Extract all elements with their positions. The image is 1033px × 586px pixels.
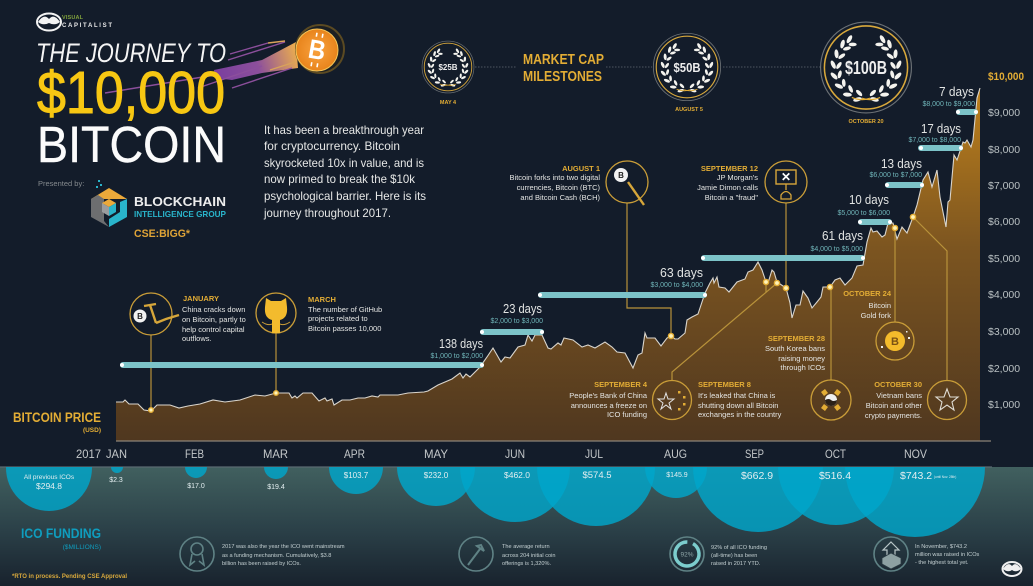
milestone: $100B <box>821 22 911 125</box>
callout: September 12: SEPTEMBER 12 <box>701 164 758 173</box>
duration: 7 days: $8,000 to $9,000 <box>922 101 975 108</box>
callout: August 1: and Bitcoin Cash (BCH) <box>520 193 600 202</box>
intro text: It has been a breakthrough year <box>264 123 424 137</box>
callout: October 24: B <box>891 336 899 348</box>
y axis labels: $4,000 <box>988 289 1020 301</box>
y axis labels: $5,000 <box>988 253 1020 265</box>
month axis: MAR <box>263 449 288 461</box>
callout: August 1: B <box>618 171 624 180</box>
icon: bitcoin coin <box>296 25 344 73</box>
callout: October 24: OCTOBER 24 <box>843 289 892 298</box>
ICO funding values: $2.3 <box>109 477 123 484</box>
stat: ICO mainstream: billion has been raised by ICOs. <box>222 561 301 567</box>
y axis labels: $7,000 <box>988 180 1020 192</box>
milestone: $50B: $50B <box>674 60 700 75</box>
bitcoin price label: BITCOIN PRICE <box>13 410 101 425</box>
duration: 13 days <box>869 156 924 188</box>
stat: 92 percent ring: 92% <box>680 552 694 558</box>
stat: ICO mainstream <box>180 537 345 571</box>
duration: 23 days: $2,000 to $3,000 <box>490 318 543 325</box>
duration: 61 days <box>701 228 865 261</box>
logo: Blockchain Intelligence Group: CSE:BIGG* <box>134 228 191 240</box>
month axis: 2017 <box>76 449 101 461</box>
callout: January: B <box>137 312 143 321</box>
logo: Visual Capitalist <box>37 14 112 30</box>
logo: Visual Capitalist: VISUAL <box>62 15 84 21</box>
duration: 138 days <box>120 336 484 368</box>
ICO funding values: $17.0 <box>187 483 205 490</box>
callout: September 4: ICO funding <box>607 410 647 419</box>
chart: bitcoin price area <box>116 88 991 441</box>
callout: September 8: SEPTEMBER 8 <box>698 380 751 389</box>
ICO funding values: All previous ICOs <box>24 474 75 481</box>
bitcoin price label: (USD) <box>83 427 101 434</box>
callout: September 4: SEPTEMBER 4 <box>594 380 648 389</box>
stat: 92 percent ring: 92% of all ICO funding <box>711 545 767 551</box>
callout: September 28: through ICOs <box>780 363 825 372</box>
callout: August 1: AUGUST 1 <box>562 164 600 173</box>
y axis labels: $9,000 <box>988 107 1020 119</box>
callout: January: JANUARY <box>183 294 219 303</box>
ICO funding label: ICO FUNDING <box>21 525 101 541</box>
intro text <box>263 123 426 220</box>
duration: 13 days: $6,000 to $7,000 <box>869 172 922 179</box>
callout: October 30: OCTOBER 30 <box>874 380 922 389</box>
stat: November record: - the highest total yet. <box>915 560 969 566</box>
callout: September 4: announces a freeze on <box>571 401 647 410</box>
duration: 63 days: $3,000 to $4,000 <box>650 282 703 289</box>
axis band divider <box>0 466 992 468</box>
callout: September 8: shutting down all Bitcoin <box>698 401 778 410</box>
month axis: OCT <box>825 449 846 461</box>
ICO funding values: $103.7 <box>344 471 369 480</box>
ICO funding values: (until Nov. 28th) <box>934 475 956 479</box>
callout: March: projects related to <box>308 314 368 323</box>
month axis <box>76 449 927 461</box>
duration: 10 days: 10 days <box>849 192 889 207</box>
ICO funding values: $662.9 <box>741 470 773 482</box>
callout: March: Bitcoin passes 10,000 <box>308 324 381 333</box>
stat: average return: The average return <box>502 544 550 550</box>
callout: September 8: exchanges in the country <box>698 410 782 419</box>
milestones heading <box>523 52 604 85</box>
ICO funding values: $462.0 <box>504 470 530 480</box>
duration: 7 days <box>922 84 978 115</box>
logo: footer mark <box>1002 562 1022 576</box>
stat: ICO mainstream: 2017 was also the year the ICO went mainstream <box>222 544 345 550</box>
callout: October 24: Gold fork <box>861 311 891 320</box>
y axis labels: $3,000 <box>988 326 1020 338</box>
callout: September 4: People's Bank of China <box>569 391 648 400</box>
callout: October 30: crypto payments. <box>865 411 922 420</box>
callout: August 1 <box>510 161 674 339</box>
milestone: $100B: OCTOBER 20 <box>848 119 884 125</box>
stat: average return <box>459 537 555 571</box>
logo: Visual Capitalist: CAPITALIST <box>62 23 112 29</box>
milestone: $50B: AUGUST 5 <box>675 107 703 113</box>
duration: 61 days: 61 days <box>822 228 863 243</box>
duration: 63 days: 63 days <box>660 265 703 280</box>
duration: 23 days: 23 days <box>503 301 542 316</box>
icon: comet trail <box>105 41 298 93</box>
callout: October 30: Bitcoin and other <box>866 401 922 410</box>
bitcoin price label <box>13 410 101 434</box>
callout: March: The number of GitHub <box>308 305 382 314</box>
stat: average return: across 204 initial coin <box>502 553 555 559</box>
stat: 92 percent ring: (all-time) has been <box>711 553 757 559</box>
callout: September 28: raising money <box>778 354 825 363</box>
ICO funding values: $294.8 <box>36 481 62 491</box>
stat: average return: offerings is 1,320%. <box>502 561 551 567</box>
logo: Blockchain Intelligence Group <box>91 180 226 240</box>
callout: September 4 <box>569 280 780 420</box>
callout: October 24: Bitcoin <box>868 301 891 310</box>
duration: 63 days <box>538 265 707 298</box>
ICO funding values <box>24 470 956 491</box>
duration: 10 days <box>837 192 892 225</box>
intro text: for cryptocurrency. Bitcoin <box>264 139 400 153</box>
milestone: $25B: MAY 4 <box>440 100 457 106</box>
duration: 10 days: $5,000 to $6,000 <box>837 210 890 217</box>
stat: November record: In November, $743.2 <box>915 544 967 550</box>
presented by: Presented by: <box>38 179 84 188</box>
logo: Blockchain Intelligence Group: INTELLIGENCE GROUP <box>134 209 226 219</box>
milestones heading: MILESTONES <box>523 69 602 85</box>
panel: ICO funding background <box>0 467 1033 586</box>
month axis: JUL <box>585 449 604 461</box>
callout: September 12: Jamie Dimon calls <box>697 183 758 192</box>
ICO funding values: $743.2 <box>900 470 932 482</box>
chart: ICO funding bubbles <box>6 467 985 537</box>
callout: October 30: Vietnam bans <box>876 391 922 400</box>
ICO funding values: $574.5 <box>582 470 612 481</box>
intro text: now primed to break the $10k <box>264 172 416 186</box>
y axis labels <box>988 71 1024 411</box>
ICO funding label: ($MILLIONS) <box>63 544 101 551</box>
intro text: journey throughout 2017. <box>263 206 391 220</box>
stat: November record <box>874 537 980 571</box>
month axis: NOV <box>904 449 927 461</box>
intro text: skyrocketed 10x in value, and is <box>264 156 424 170</box>
callout: September 12: Bitcoin a "fraud" <box>705 193 758 202</box>
month axis: FEB <box>185 449 204 461</box>
y axis labels: $10,000 <box>988 71 1024 83</box>
duration: 17 days <box>908 121 963 151</box>
callout: September 28: SEPTEMBER 28 <box>768 334 825 343</box>
callout: January: on Bitcoin, partly to <box>182 315 246 324</box>
duration: 17 days: 17 days <box>921 121 961 136</box>
duration: 138 days: $1,000 to $2,000 <box>430 353 483 360</box>
duration: 17 days: $7,000 to $8,000 <box>908 137 961 144</box>
callout: September 8 <box>698 279 782 419</box>
title: $10,000 <box>37 60 225 126</box>
milestone: $25B: $25B <box>438 63 458 72</box>
month axis: SEP <box>745 449 764 461</box>
duration: 13 days: 13 days <box>881 156 922 171</box>
callout: January: outflows. <box>182 334 212 343</box>
callout: March <box>256 293 382 395</box>
callout: September 28: South Korea bans <box>765 344 825 353</box>
month axis: AUG <box>664 449 687 461</box>
stat: ICO mainstream: as a funding mechanism. Cumulatively, $3.8 <box>222 553 331 559</box>
logo: Blockchain Intelligence Group: BLOCKCHAIN <box>134 194 226 209</box>
callout: January: help control capital <box>182 325 245 334</box>
ICO funding values: $516.4 <box>819 470 851 482</box>
month axis: JAN <box>106 449 127 461</box>
callout: October 30 <box>865 214 966 420</box>
y axis labels: $8,000 <box>988 144 1020 156</box>
stat: 92 percent ring: raised in 2017 YTD. <box>711 561 761 567</box>
callout: September 12: ✕ <box>781 170 791 184</box>
title <box>36 38 226 173</box>
callout: January: China cracks down <box>182 305 245 314</box>
icon: bitcoin coin: B <box>306 34 328 66</box>
stat: November record: million was raised in ICOs <box>915 552 980 558</box>
month axis: MAY <box>424 449 448 461</box>
title: THE JOURNEY TO <box>36 38 226 68</box>
callout: August 1: Bitcoin forks into two digital <box>510 173 600 182</box>
intro text: psychological barrier. Here is its <box>264 189 426 203</box>
callout: March: MARCH <box>308 295 336 304</box>
duration: 23 days <box>480 301 544 335</box>
month axis: APR <box>344 449 365 461</box>
month axis: JUN <box>505 449 525 461</box>
duration: 7 days: 7 days <box>939 84 974 99</box>
callout: August 1: currencies, Bitcoin (BTC) <box>517 183 600 192</box>
ICO funding values: $232.0 <box>424 471 449 480</box>
stat: 92 percent ring <box>670 537 767 571</box>
ICO funding values: $145.9 <box>666 472 688 479</box>
ICO funding values: $19.4 <box>267 484 285 491</box>
panel: market cap milestones <box>422 22 911 125</box>
callout: January <box>130 293 246 412</box>
callout: September 8: It's leaked that China is <box>698 391 776 400</box>
ICO funding label <box>21 525 101 551</box>
duration: 61 days: $4,000 to $5,000 <box>810 246 863 253</box>
y axis labels: $1,000 <box>988 399 1020 411</box>
milestones heading: MARKET CAP <box>523 52 604 68</box>
callout: September 12: JP Morgan's <box>717 173 758 182</box>
y axis labels: $6,000 <box>988 216 1020 228</box>
milestone: $50B <box>653 33 721 113</box>
milestone: $25B <box>422 41 474 106</box>
duration: 138 days: 138 days <box>439 336 483 351</box>
y axis labels: $2,000 <box>988 363 1020 375</box>
footnote: *RTO in process. Pending CSE Approval <box>12 574 127 580</box>
milestone: $100B: $100B <box>845 58 887 78</box>
callout: September 12 <box>697 161 807 291</box>
callout: September 28 <box>765 284 851 420</box>
title: BITCOIN <box>37 116 226 173</box>
callout: October 24 <box>843 225 914 360</box>
